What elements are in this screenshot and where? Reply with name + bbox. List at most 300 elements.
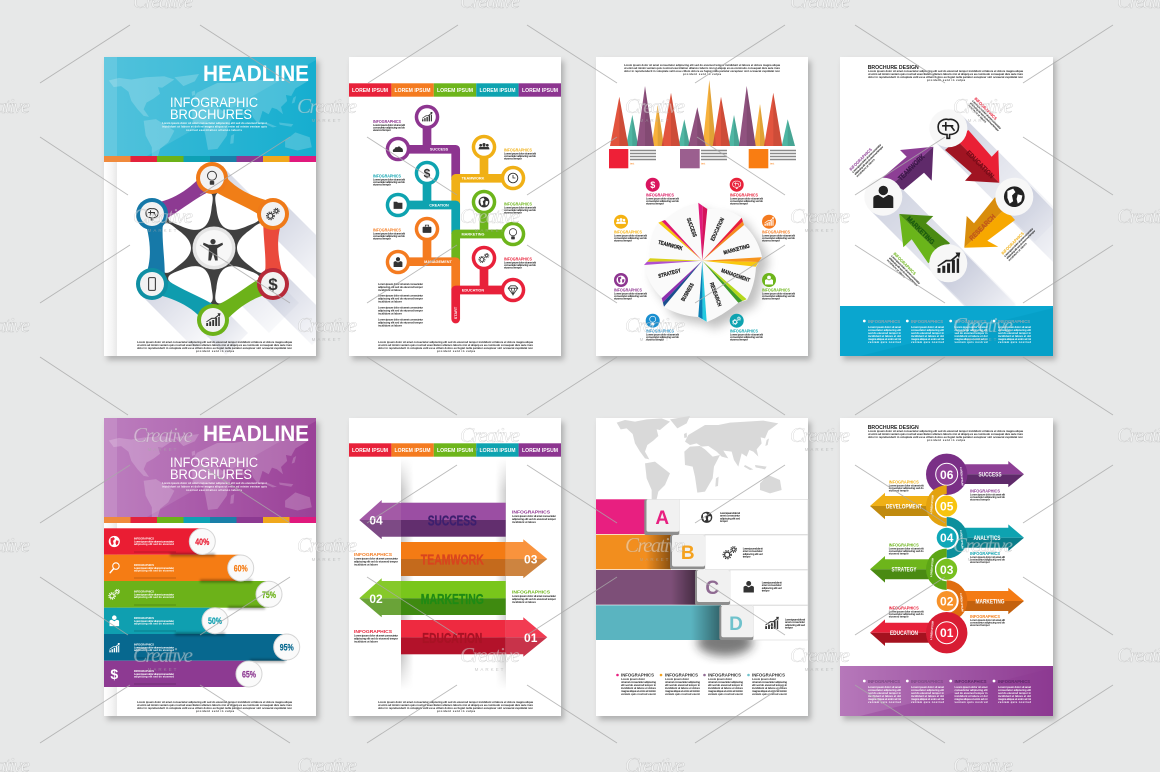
node: 04 bbox=[937, 517, 967, 558]
item: person: Lorem ipsum dolor sit amet elit bbox=[762, 292, 795, 296]
column 1: consectetur adipiscing elit bbox=[868, 688, 901, 692]
column 4 bbox=[993, 319, 1031, 344]
column 1: INFOGRAPHICS bbox=[621, 672, 654, 678]
intro text bbox=[868, 429, 1024, 442]
column 1: magna aliqua ut enim ad minim bbox=[621, 689, 657, 693]
column 2: Lorem ipsum dolor sit amet bbox=[911, 325, 944, 329]
node: 06 bbox=[926, 454, 967, 495]
footer text: proident sunt in culpa bbox=[437, 709, 476, 713]
watermark: Creative Market: Creative bbox=[953, 533, 1013, 557]
step A: A bbox=[655, 508, 669, 529]
label: orange: eiusmod tempor bbox=[970, 623, 990, 627]
item: bulb: Lorem ipsum dolor sit amet elit bbox=[646, 332, 679, 336]
watermark: Creative Market: Creative bbox=[133, 204, 193, 228]
world map bbox=[109, 74, 312, 164]
label: purple: INFOGRAPHICS bbox=[373, 119, 401, 124]
arrow labels: EDUCATION bbox=[964, 150, 995, 180]
footer text bbox=[137, 700, 292, 713]
label: purple: Lorem ipsum dolor sit amet elit bbox=[970, 492, 1005, 496]
arrow: success bbox=[960, 461, 1024, 487]
item: chart: INFOGRAPHICS bbox=[762, 230, 790, 234]
item: globe: Lorem ipsum dolor sit bbox=[720, 511, 740, 515]
label: purple: consectetur adipiscing sed do bbox=[970, 495, 1005, 499]
watermark: Creative Market: MARKET bbox=[475, 447, 505, 452]
label: yellow: INFOGRAPHICS bbox=[1000, 231, 1025, 256]
arrow: marketing bbox=[359, 578, 506, 617]
item: dollar: consectetur adipiscing sed do bbox=[646, 199, 679, 203]
label: green: adipiscing elit sed do eiusmod tempor bbox=[888, 256, 919, 287]
panel: diamond arrows brochure bbox=[840, 57, 1059, 363]
panel: tree timeline brochure bbox=[349, 57, 564, 360]
pinwheel labels: MANAGEMENT bbox=[720, 268, 751, 284]
item: bulb: consectetur adipiscing sed do bbox=[646, 335, 679, 339]
step D bbox=[719, 606, 753, 640]
hexagon diagram bbox=[112, 151, 316, 345]
node: 02: LOREM IPSUM bbox=[959, 593, 965, 613]
node: person bbox=[864, 178, 902, 216]
bar: 75%: 75% bbox=[262, 590, 276, 600]
label: orange: INFOGRAPHICS bbox=[373, 228, 401, 232]
footer text: dolor in reprehenderit in voluptate velit esse cillum dolore eu fugiat nulla pariatur excepteur sint occaecat cupidatat non bbox=[137, 706, 292, 710]
footer text: Lorem ipsum dolor sit amet consectetur adipiscing elit sed do eiusmod tempor incididunt ut labore et dolore magna aliqua bbox=[137, 700, 292, 704]
column 3: sit amet consectetur adipiscing bbox=[708, 680, 743, 684]
label: purple: incididunt ut labore bbox=[512, 520, 536, 524]
footer band bbox=[840, 666, 1053, 716]
watermark: Creative Market: MARKET bbox=[968, 337, 998, 342]
left paragraphs: Lorem ipsum dolor sit amet consectetur bbox=[378, 282, 423, 286]
label: purple: INFOGRAPHICS bbox=[512, 510, 550, 514]
column 4: INFOGRAPHICS bbox=[752, 672, 785, 678]
item: chart: amet consectetur bbox=[785, 620, 805, 624]
node: person bbox=[386, 250, 410, 274]
column 4: incididunt ut labore et dolore bbox=[752, 686, 788, 690]
footer text: Lorem ipsum dolor sit amet consectetur adipiscing elit sed do eiusmod tempor incididunt ut labore et dolore magna aliqua bbox=[137, 340, 292, 344]
tree labels bbox=[424, 148, 485, 319]
tree labels: CREATION bbox=[429, 203, 449, 207]
item: dollar: eiusmod tempor bbox=[646, 202, 664, 206]
subtitle: BROCHURES bbox=[170, 466, 252, 482]
node: globe bbox=[995, 178, 1033, 216]
column 2: sed do eiusmod tempor in bbox=[911, 691, 944, 695]
footer text: ut enim ad minim veniam quis nostrud exercitation ullamco laboris nisi ut aliquip ex ea commodo consequat duis aute irure bbox=[137, 703, 292, 707]
label: orange bbox=[354, 552, 398, 566]
column 3: elit sed do eiusmod tempor in bbox=[708, 683, 743, 687]
label: yellow: consectetur adipiscing sed do bbox=[504, 154, 536, 158]
step C: C bbox=[705, 578, 719, 599]
left paragraphs: incididunt ut labore bbox=[378, 288, 402, 292]
label: teal: eiusmod tempor bbox=[373, 182, 391, 186]
label: orange: Lorem ipsum dolor sit amet consectetur bbox=[354, 556, 398, 560]
label: red bbox=[889, 606, 924, 618]
label: green: INFOGRAPHICS bbox=[504, 202, 532, 206]
label: orange: incididunt ut labore bbox=[354, 562, 378, 566]
footer text: Lorem ipsum dolor sit amet consectetur adipiscing elit sed do eiusmod tempor incididunt ut labore et dolore magna aliqua bbox=[378, 340, 534, 344]
label: red: INFOGRAPHICS bbox=[973, 96, 998, 121]
label: green: incididunt ut labore bbox=[886, 258, 907, 279]
bar: 95%: adipiscing elit sed do eiusmod bbox=[134, 648, 174, 652]
headline: HEADLINE bbox=[203, 61, 309, 86]
left paragraphs: incididunt ut labore bbox=[378, 324, 402, 328]
label: green bbox=[889, 542, 924, 556]
footer text: ut enim ad minim veniam quis nostrud exercitation ullamco laboris nisi ut aliquip ex ea commodo consequat duis aute irure bbox=[137, 343, 292, 347]
node: phone bbox=[136, 268, 168, 300]
item: chart bbox=[762, 215, 795, 242]
label: green bbox=[886, 251, 924, 289]
step A bbox=[644, 499, 679, 535]
item: person bbox=[744, 580, 782, 593]
node: 03 bbox=[926, 549, 957, 590]
watermark: Creative Market: Creative bbox=[297, 533, 357, 557]
bar: 50%: 50% bbox=[208, 616, 222, 626]
tab bar: LOREM IPSUM bbox=[480, 448, 516, 454]
item: person: adipiscing elit sed bbox=[762, 586, 782, 590]
header text: incididunt ut labore et dolore magna aliqua ut enim ad minim veniam quis bbox=[162, 484, 268, 488]
node: 02 bbox=[937, 580, 967, 622]
item: dollar: INFOGRAPHICS bbox=[646, 192, 674, 198]
label: green: INFOGRAPHICS bbox=[889, 542, 919, 548]
arrow: marketing bbox=[960, 588, 1024, 614]
item: team: consectetur adipiscing sed do bbox=[614, 236, 647, 240]
node: gears bbox=[257, 198, 289, 230]
column 2: elit sed do eiusmod tempor in bbox=[665, 683, 700, 687]
arrow: marketing: 02 bbox=[369, 592, 383, 606]
left paragraphs: Lorem ipsum dolor sit amet consectetur bbox=[378, 294, 423, 298]
watermark: Creative Market: MARKET bbox=[640, 337, 670, 342]
column 1: sit amet consectetur adipiscing bbox=[621, 680, 656, 684]
node: 01 bbox=[926, 612, 967, 653]
watermark: Creative Market: MARKET bbox=[148, 228, 178, 233]
arrow: education: EDUCATION bbox=[422, 630, 482, 647]
bar: 60%: adipiscing elit sed do eiusmod bbox=[134, 568, 174, 572]
bar: 75% bbox=[109, 581, 282, 607]
pinwheel labels: MARKETING bbox=[723, 244, 751, 256]
label: orange: INFOGRAPHICS bbox=[354, 552, 392, 557]
left paragraphs: incididunt ut labore bbox=[378, 300, 402, 304]
column 4 bbox=[747, 672, 788, 696]
column 1: veniam quis nostrud bbox=[868, 700, 901, 704]
tab bar: LOREM IPSUM bbox=[522, 88, 558, 94]
node: brain bbox=[136, 198, 168, 230]
panel: ABCD steps brochure bbox=[596, 416, 811, 720]
column 1: magna aliqua ut enim ad mi bbox=[868, 337, 901, 341]
tab bar: LOREM IPSUM bbox=[352, 88, 388, 94]
column 3: INFOGRAPHICS bbox=[954, 319, 987, 324]
label: red: INFOGRAPHICS bbox=[504, 256, 532, 262]
column 3: veniam quis nostrud bbox=[954, 340, 988, 344]
tab bar: LOREM IPSUM bbox=[394, 88, 430, 94]
watermark: Creative Market: MARKET bbox=[968, 118, 998, 123]
column 4: veniam quis nostrud bbox=[998, 700, 1031, 704]
column 4: incididunt ut labore et dol bbox=[998, 694, 1031, 698]
watermark: Creative Market: MARKET bbox=[312, 118, 342, 123]
node: 03: LOREM IPSUM bbox=[929, 557, 935, 577]
column 2: incididunt ut labore et dol bbox=[911, 694, 944, 698]
label: red: Lorem ipsum dolor sit amet elit bbox=[504, 260, 536, 264]
center node bbox=[192, 226, 236, 270]
footer text bbox=[137, 340, 292, 353]
arrow: education bbox=[870, 619, 935, 646]
label: green: INFOGRAPHICS bbox=[512, 590, 550, 594]
subtitle bbox=[170, 94, 258, 122]
arrow: education bbox=[401, 617, 547, 657]
label: yellow: INFOGRAPHICS bbox=[504, 148, 532, 152]
item: gears: tempor bbox=[743, 554, 751, 558]
item: bulb: eiusmod tempor bbox=[646, 338, 664, 342]
label: red: consectetur adipiscing sed do bbox=[504, 263, 536, 267]
bar: 40%: adipiscing elit sed do eiusmod bbox=[134, 542, 174, 546]
item: globe: adipiscing elit sed bbox=[720, 516, 740, 520]
arrow: marketing: MARKETING bbox=[976, 598, 1004, 605]
node: folder bbox=[386, 193, 410, 217]
node: brain bbox=[929, 109, 967, 147]
watermark: Creative Market: MARKET bbox=[312, 557, 342, 562]
label: green: incididunt ut labore bbox=[512, 600, 536, 604]
item: globe: consectetur adipiscing sed do bbox=[614, 294, 647, 298]
label: purple bbox=[848, 140, 886, 178]
bar: 65%: adipiscing elit sed do eiusmod bbox=[134, 674, 174, 678]
arrow: development bbox=[870, 493, 935, 519]
label: yellow: consectetur adipiscing sed do bbox=[889, 486, 924, 490]
label: red: consectetur adipiscing sed do bbox=[889, 612, 924, 616]
bar: 95% bbox=[109, 634, 300, 660]
column 4: magna aliqua ut enim ad mi bbox=[998, 337, 1031, 341]
legend squares bbox=[609, 149, 796, 168]
label: green bbox=[512, 590, 556, 604]
left paragraphs: adipiscing elit sed do eiusmod tempor bbox=[378, 296, 423, 300]
drop shadow under steps bbox=[697, 628, 753, 656]
intro text: proident sunt in culpa bbox=[683, 72, 722, 76]
label: red bbox=[504, 256, 536, 270]
bar: 95%: 95% bbox=[280, 642, 294, 652]
item: gears: Lorem ipsum dolor sit amet elit bbox=[730, 332, 763, 336]
label: green: Lorem ipsum dolor sit amet consectetur bbox=[890, 254, 921, 285]
column 2: sit amet consectetur adipiscing bbox=[665, 680, 700, 684]
intro text: dolor in reprehenderit in voluptate velit esse cillum dolore eu fugiat nulla pariatur excepteur sint occaecat cupidatat non bbox=[868, 75, 1023, 79]
item: globe: tempor bbox=[720, 519, 728, 523]
bar: 50%: INFOGRAPHICS bbox=[134, 616, 154, 620]
intro text: dolor in reprehenderit in voluptate velit esse cillum dolore eu fugiat nulla pariatur excepteur sint occaecat cupidatat non bbox=[868, 435, 1023, 439]
label: yellow: eiusmod tempor bbox=[504, 156, 522, 160]
item: bulb bbox=[646, 314, 679, 342]
label: orange: eiusmod tempor bbox=[373, 236, 391, 240]
bar: 65% bbox=[110, 661, 262, 687]
column 2: INFOGRAPHICS bbox=[911, 319, 943, 324]
footer text: proident sunt in culpa bbox=[196, 709, 234, 713]
node: diamond bbox=[501, 278, 525, 302]
step C bbox=[695, 570, 730, 605]
column 3: consectetur adipiscing elit bbox=[954, 688, 988, 692]
watermark: Creative Market: MARKET bbox=[475, 228, 505, 233]
arrow: development: DEVELOPMENT bbox=[886, 503, 922, 510]
legend squares: text bbox=[630, 162, 634, 166]
label: red: eiusmod tempor bbox=[889, 614, 909, 618]
intro text: dolor in reprehenderit in voluptate velit esse cillum dolore eu fugiat nulla pariatur excepteur sint occaecat cupidatat non bbox=[624, 69, 780, 73]
label: purple: adipiscing elit sed do eiusmod tempor bbox=[853, 145, 884, 176]
item: team: Lorem ipsum dolor sit amet elit bbox=[614, 234, 647, 238]
label: orange: Lorem ipsum dolor sit amet elit bbox=[373, 232, 405, 236]
label: orange bbox=[373, 228, 405, 240]
arrow: analytics: ANALYTICS bbox=[974, 535, 1001, 542]
left paragraphs: adipiscing elit sed do eiusmod tempor bbox=[378, 285, 423, 289]
item: chart: eiusmod tempor bbox=[762, 238, 780, 242]
watermark: Creative Market: Creative bbox=[133, 643, 193, 667]
column 3: magna aliqua ut enim ad mi bbox=[954, 337, 988, 341]
item: brain bbox=[730, 178, 763, 206]
watermark: Creative Market: Creative bbox=[625, 94, 685, 118]
column 1: sed do eiusmod tempor in bbox=[868, 331, 901, 335]
column 2: magna aliqua ut enim ad minim bbox=[665, 689, 701, 693]
bar: 65%: INFOGRAPHICS bbox=[134, 669, 154, 673]
arrow: education: EDUCATION bbox=[890, 630, 918, 637]
item: person bbox=[762, 273, 795, 300]
footer text: ut enim ad minim veniam quis nostrud exercitation ullamco laboris nisi ut aliquip ex ea commodo consequat duis aute irure bbox=[378, 343, 534, 347]
column 4: veniam quis nostrud exerci bbox=[752, 692, 787, 696]
label: red bbox=[967, 96, 1005, 134]
node: chart bbox=[415, 105, 439, 129]
item: team: INFOGRAPHICS bbox=[614, 230, 642, 234]
label: red: adipiscing elit sed do eiusmod tempor bbox=[969, 101, 1000, 132]
column 1 bbox=[863, 679, 901, 704]
column 2: incididunt ut labore et dol bbox=[911, 334, 944, 338]
watermark: Creative Market: MARKET bbox=[805, 447, 835, 452]
arrow: marketing: MARKETING bbox=[421, 591, 484, 608]
arrow: success bbox=[359, 500, 506, 539]
label: purple bbox=[970, 488, 1005, 502]
node: 05: LOREM IPSUM bbox=[929, 494, 935, 514]
label: red: incididunt ut labore bbox=[967, 103, 988, 124]
pinwheel labels bbox=[657, 217, 751, 307]
node: chart bbox=[929, 244, 967, 282]
label: teal: INFOGRAPHICS bbox=[970, 551, 1000, 556]
column 1: INFOGRAPHICS bbox=[868, 679, 900, 684]
label: purple: Lorem ipsum dolor sit amet consectetur bbox=[851, 143, 882, 174]
label: teal: INFOGRAPHICS bbox=[373, 174, 401, 178]
column 1 bbox=[616, 672, 657, 696]
watermark: Creative Market: Creative bbox=[297, 94, 357, 118]
label: red: Lorem ipsum dolor sit amet elit bbox=[889, 610, 924, 614]
item: person: tempor bbox=[762, 588, 770, 592]
column 4: sed do eiusmod tempor in bbox=[998, 691, 1031, 695]
label: yellow: Lorem ipsum dolor sit amet consectetur bbox=[1003, 227, 1034, 258]
label: purple bbox=[373, 119, 405, 132]
column 4: magna aliqua ut enim ad minim bbox=[752, 689, 788, 693]
node: team bbox=[472, 135, 496, 159]
item: team bbox=[614, 215, 647, 242]
subtitle: BROCHURES bbox=[170, 106, 252, 122]
bar: 40%: Lorem ipsum dolor sit amet consectetur bbox=[134, 539, 174, 543]
node: 06: 06 bbox=[940, 468, 954, 482]
watermark: Creative Market: Creative bbox=[460, 204, 520, 228]
node: dollar bbox=[415, 161, 439, 185]
column 3: incididunt ut labore et dol bbox=[954, 334, 988, 338]
legend squares: text bbox=[770, 162, 774, 166]
subtitle bbox=[170, 454, 258, 482]
label: teal: Lorem ipsum dolor sit amet elit bbox=[970, 555, 1005, 559]
tab bar: LOREM IPSUM bbox=[522, 448, 558, 454]
arrow labels: RESEARCH bbox=[968, 213, 997, 242]
left paragraphs: adipiscing elit sed do eiusmod tempor bbox=[378, 320, 423, 324]
item: brain: consectetur adipiscing sed do bbox=[730, 199, 763, 203]
label: orange: INFOGRAPHICS bbox=[970, 614, 1000, 619]
item: gears: adipiscing elit sed bbox=[743, 552, 763, 556]
column 1: veniam quis nostrud bbox=[868, 340, 901, 344]
label: red: INFOGRAPHICS bbox=[354, 629, 392, 634]
column 2: magna aliqua ut enim ad mi bbox=[911, 697, 944, 701]
column 3: magna aliqua ut enim ad mi bbox=[954, 697, 988, 701]
column 1: elit sed do eiusmod tempor in bbox=[621, 683, 656, 687]
pinwheel labels: STRATEGY bbox=[658, 268, 682, 280]
label: teal: consectetur adipiscing sed do bbox=[970, 558, 1005, 562]
column 2: veniam quis nostrud bbox=[911, 700, 944, 704]
label: orange: Lorem ipsum dolor sit amet elit bbox=[970, 618, 1005, 622]
footer text: dolor in reprehenderit in voluptate velit esse cillum dolore eu fugiat nulla pariatur excepteur sint occaecat cupidatat non bbox=[378, 346, 533, 350]
column 1: magna aliqua ut enim ad mi bbox=[868, 697, 901, 701]
item: dollar: $ bbox=[650, 180, 655, 190]
node: 06: LOREM IPSUM bbox=[959, 467, 965, 487]
node: dollar: $ bbox=[268, 275, 278, 294]
item: chart: Lorem ipsum dolor sit bbox=[785, 618, 805, 622]
item: person: amet consectetur bbox=[762, 583, 782, 587]
intro text bbox=[868, 69, 1024, 82]
label: green: consectetur adipiscing sed do bbox=[504, 208, 536, 212]
left paragraphs: Lorem ipsum dolor sit amet consectetur bbox=[378, 306, 423, 310]
arrow labels: MARKETING bbox=[905, 216, 936, 246]
node: bulb bbox=[501, 222, 525, 246]
watermark: Creative Market: Creative bbox=[625, 313, 685, 337]
header text bbox=[162, 481, 268, 492]
bar: 50%: Lorem ipsum dolor sit amet consectetur bbox=[134, 619, 174, 623]
bar: 60% bbox=[110, 555, 254, 581]
label: purple: INFOGRAPHICS bbox=[970, 488, 1000, 494]
item: chart: adipiscing elit sed bbox=[785, 623, 805, 627]
bar: 65%: Lorem ipsum dolor sit amet consectetur bbox=[134, 672, 174, 676]
arrow labels: TEAMWORK bbox=[897, 153, 926, 182]
label: red bbox=[354, 629, 398, 644]
arrow: green bbox=[899, 214, 950, 263]
footer text: proident sunt in culpa bbox=[196, 349, 234, 353]
panel: mountains and pinwheel brochure bbox=[596, 57, 811, 360]
column 1: Lorem ipsum dolor bbox=[621, 677, 645, 681]
watermark: Creative Market: MARKET bbox=[475, 667, 505, 672]
label: yellow: eiusmod tempor bbox=[889, 488, 909, 492]
node: bulb bbox=[196, 162, 228, 194]
watermark: Creative Market: MARKET bbox=[148, 447, 178, 452]
label: teal: eiusmod tempor bbox=[970, 560, 990, 564]
watermark: Creative Market: Creative bbox=[790, 423, 850, 447]
column 4: INFOGRAPHICS bbox=[998, 679, 1030, 684]
column 4: incididunt ut labore et dol bbox=[998, 334, 1031, 338]
item: dollar bbox=[646, 178, 679, 206]
color bars bbox=[596, 499, 721, 640]
label: purple: Lorem ipsum dolor sit amet consectetur bbox=[512, 514, 556, 518]
label: purple: adipiscing elit sed do eiusmod tempor bbox=[512, 517, 556, 521]
column 4: sit amet consectetur adipiscing bbox=[752, 680, 787, 684]
label: green bbox=[504, 202, 536, 214]
label: red: eiusmod tempor bbox=[504, 266, 522, 270]
label: purple bbox=[512, 510, 556, 524]
bar: 40%: INFOGRAPHICS bbox=[134, 536, 154, 540]
panel: purple percentage bars cover bbox=[104, 418, 319, 720]
left paragraphs: incididunt ut labore bbox=[378, 312, 402, 316]
column 2: Lorem ipsum dolor bbox=[665, 677, 689, 681]
watermark: Creative Market: MARKET bbox=[640, 557, 670, 562]
item: gears: INFOGRAPHICS bbox=[730, 328, 758, 334]
watermark: Creative Market: Creative bbox=[625, 533, 685, 557]
long shadows bbox=[871, 116, 1053, 306]
item: gears: amet consectetur bbox=[743, 549, 763, 553]
column 3: veniam quis nostrud bbox=[954, 700, 988, 704]
header text bbox=[162, 121, 268, 132]
